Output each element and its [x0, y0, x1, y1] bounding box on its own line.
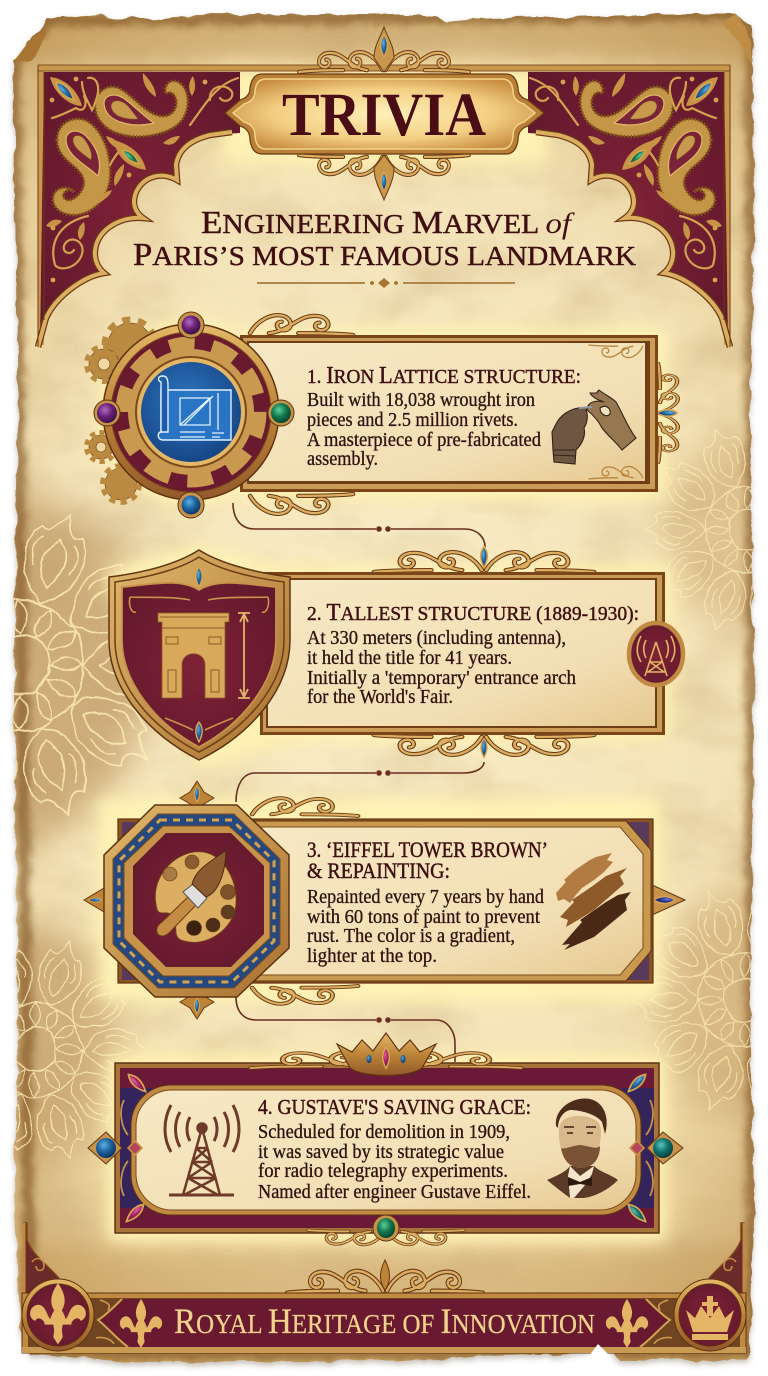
bottom tear notch [589, 1344, 610, 1356]
icon: shield with arch [109, 550, 290, 760]
body 3: lighter at the top. [307, 946, 437, 967]
icon: medallion with blueprint [94, 312, 294, 518]
card 4 ornaments and gems [88, 1033, 683, 1245]
heading 3: & REPAINTING: [307, 858, 450, 883]
heading 1: 1. IRON LATTICE STRUCTURE: [307, 363, 581, 389]
card 4 frame [115, 1063, 659, 1233]
icon: radio tower [165, 1105, 239, 1195]
body 3: Repainted every 7 years by hand [307, 887, 544, 908]
mandala: left lower [14, 940, 150, 1159]
card 3 frame [118, 819, 653, 983]
header frame [38, 65, 730, 347]
small fleur right [606, 1299, 648, 1348]
mandala: right upper [643, 429, 754, 630]
panel: fact 4 [88, 1033, 683, 1245]
connector 3-4 [236, 997, 455, 1062]
body 1: Built with 18,038 wrought iron [307, 390, 535, 411]
body 2: Initially a 'temporary' entrance arch [307, 668, 576, 689]
body 2: it held the title for 41 years. [307, 648, 512, 669]
body 2 [307, 628, 576, 708]
card 1 corner scrolls [589, 345, 643, 479]
small fleur left [120, 1299, 162, 1348]
heading 4: 4. GUSTAVE'S SAVING GRACE: [258, 1095, 531, 1119]
connector 2-3 [236, 762, 484, 802]
panel: fact 1 [87, 312, 678, 518]
heading 3 [307, 837, 548, 883]
heading 2: 2. TALLEST STRUCTURE (1889-1930): [307, 600, 639, 626]
subtitle: ENGINEERING MARVEL of [201, 204, 575, 240]
body 1 [307, 390, 541, 470]
card 3 ornaments [84, 781, 685, 1019]
connector 1-2 [233, 503, 485, 547]
mandala: left upper [12, 514, 149, 816]
title text: TRIVIA [282, 82, 486, 149]
body 1: pieces and 2.5 million rivets. [307, 410, 518, 431]
subtitle: PARIS’S MOST FAMOUS LANDMARK [133, 236, 637, 272]
icon: paint swatches [556, 853, 631, 950]
body 3: with 60 tons of paint to prevent [307, 907, 541, 928]
body 2: for the World's Fair. [307, 687, 453, 708]
panel: fact 2 [109, 547, 683, 760]
body 1: A masterpiece of pre-fabricated [307, 430, 541, 451]
subtitle divider [257, 278, 515, 288]
card 2 frame [260, 572, 665, 735]
gears [87, 320, 155, 502]
icon: gloved hands [552, 390, 636, 464]
body 4: Named after engineer Gustave Eiffel. [258, 1182, 531, 1203]
icon: octagon with palette [104, 805, 289, 997]
body 3: rust. The color is a gradient, [307, 926, 515, 947]
crown circle [674, 1279, 746, 1351]
soft glows [99, 72, 670, 1240]
title plaque [225, 74, 544, 154]
footer corners [24, 1223, 744, 1296]
footer text: ROYAL HERITAGE OF INNOVATION [174, 1301, 595, 1341]
body 3 [307, 887, 544, 967]
panel: fact 3 [84, 781, 685, 1019]
card 1 ornaments [250, 315, 678, 514]
title ornament top [299, 27, 469, 72]
card 2 ornaments [374, 547, 594, 757]
body 4: it was saved by its strategic value [258, 1142, 504, 1163]
fleur-de-lis circle [22, 1279, 94, 1351]
icon: portrait of Gustave Eiffel [547, 1099, 618, 1198]
heading 3: 3. ‘EIFFEL TOWER BROWN’ [307, 837, 548, 862]
footer ornament [287, 1260, 483, 1293]
body 4 [258, 1122, 531, 1203]
subtitle [133, 204, 637, 272]
icon: radio badge [629, 623, 683, 685]
body 2: At 330 meters (including antenna), [307, 628, 566, 649]
card 1 frame [240, 335, 658, 492]
title ornament bottom [299, 155, 469, 200]
footer banner [22, 1279, 746, 1356]
body 1: assembly. [307, 449, 378, 470]
body 4: for radio telegraphy experiments. [258, 1161, 508, 1182]
body 4: Scheduled for demolition in 1909, [258, 1122, 510, 1143]
mandala: right lower [636, 891, 752, 1112]
